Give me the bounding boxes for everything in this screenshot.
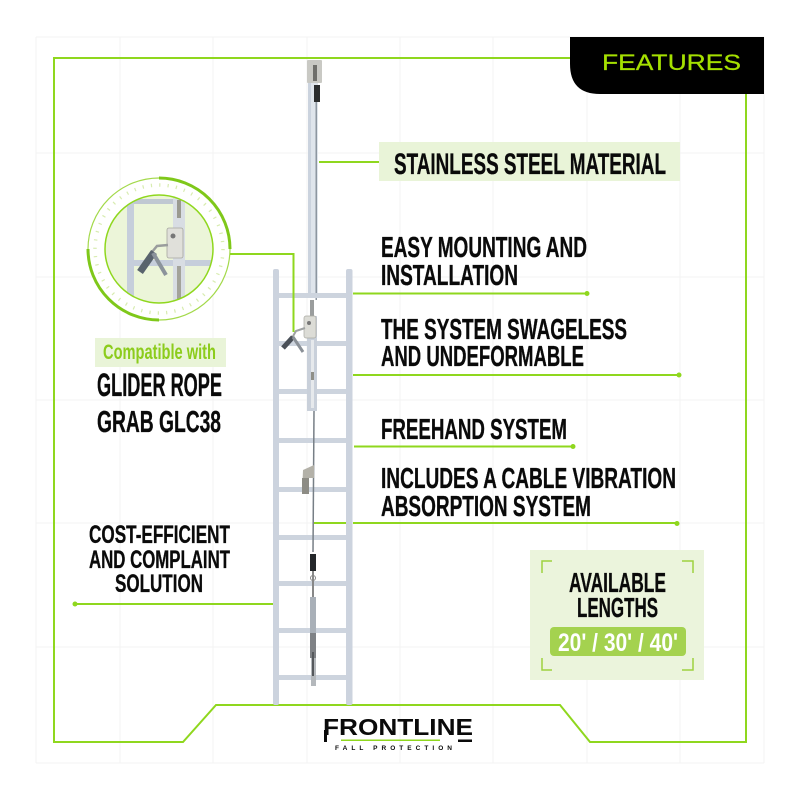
lengths heading: LENGTHS xyxy=(577,592,658,623)
compatible product name xyxy=(97,367,222,439)
lengths heading: AVAILABLE xyxy=(569,567,666,598)
callout: easy mounting: INSTALLATION xyxy=(381,260,518,292)
absorber and tensioner xyxy=(310,554,316,686)
callout: swageless: THE SYSTEM SWAGELESS xyxy=(381,314,627,346)
logo: FALL PROTECTION xyxy=(335,745,452,752)
callout: cost-efficient: COST-EFFICIENT xyxy=(89,521,230,549)
left rail xyxy=(273,269,279,705)
green frame xyxy=(54,58,746,742)
features tab xyxy=(570,37,764,94)
lengths pill: 20' / 30' / 40' xyxy=(558,629,678,657)
features tab: FEATURES xyxy=(602,50,741,75)
callout: freehand system: FREEHAND SYSTEM xyxy=(381,414,567,446)
corner brackets xyxy=(542,561,693,670)
ladder xyxy=(273,60,352,705)
magnifier leader line xyxy=(230,254,294,332)
cable grip device xyxy=(283,316,316,352)
top bracket and spring xyxy=(307,60,322,102)
callout: freehand system xyxy=(354,414,576,449)
compatible product name: GRAB GLC38 xyxy=(97,404,221,439)
callout: easy mounting xyxy=(353,232,590,296)
callout: cost-efficient xyxy=(72,521,273,606)
rungs xyxy=(279,293,346,680)
right rail xyxy=(346,269,352,705)
detail magnifier circle xyxy=(88,178,230,320)
vibration bracket xyxy=(302,465,314,494)
callout: vibration absorption xyxy=(314,463,680,526)
lengths heading xyxy=(569,567,666,623)
panel: available lengths xyxy=(530,550,704,680)
compatible product name: GLIDER ROPE xyxy=(97,367,222,403)
logo xyxy=(323,714,473,752)
callout: easy mounting: EASY MOUNTING AND xyxy=(381,232,587,264)
cable xyxy=(313,411,314,552)
upper anchorage bar xyxy=(308,62,318,300)
callout: cost-efficient: AND COMPLAINT xyxy=(89,546,230,574)
lower mount bar xyxy=(307,300,317,411)
callout: swageless xyxy=(353,314,682,378)
logo: FRONTLINE xyxy=(323,714,473,740)
callout: swageless: AND UNDEFORMABLE xyxy=(381,341,584,373)
compatible with label xyxy=(95,338,226,367)
compatible with label: Compatible with xyxy=(103,341,216,364)
zoomed ladder detail xyxy=(127,198,211,300)
callout: vibration absorption: ABSORPTION SYSTEM xyxy=(381,491,591,523)
callout: stainless steel material xyxy=(319,142,680,181)
callout: cost-efficient: SOLUTION xyxy=(115,570,203,598)
